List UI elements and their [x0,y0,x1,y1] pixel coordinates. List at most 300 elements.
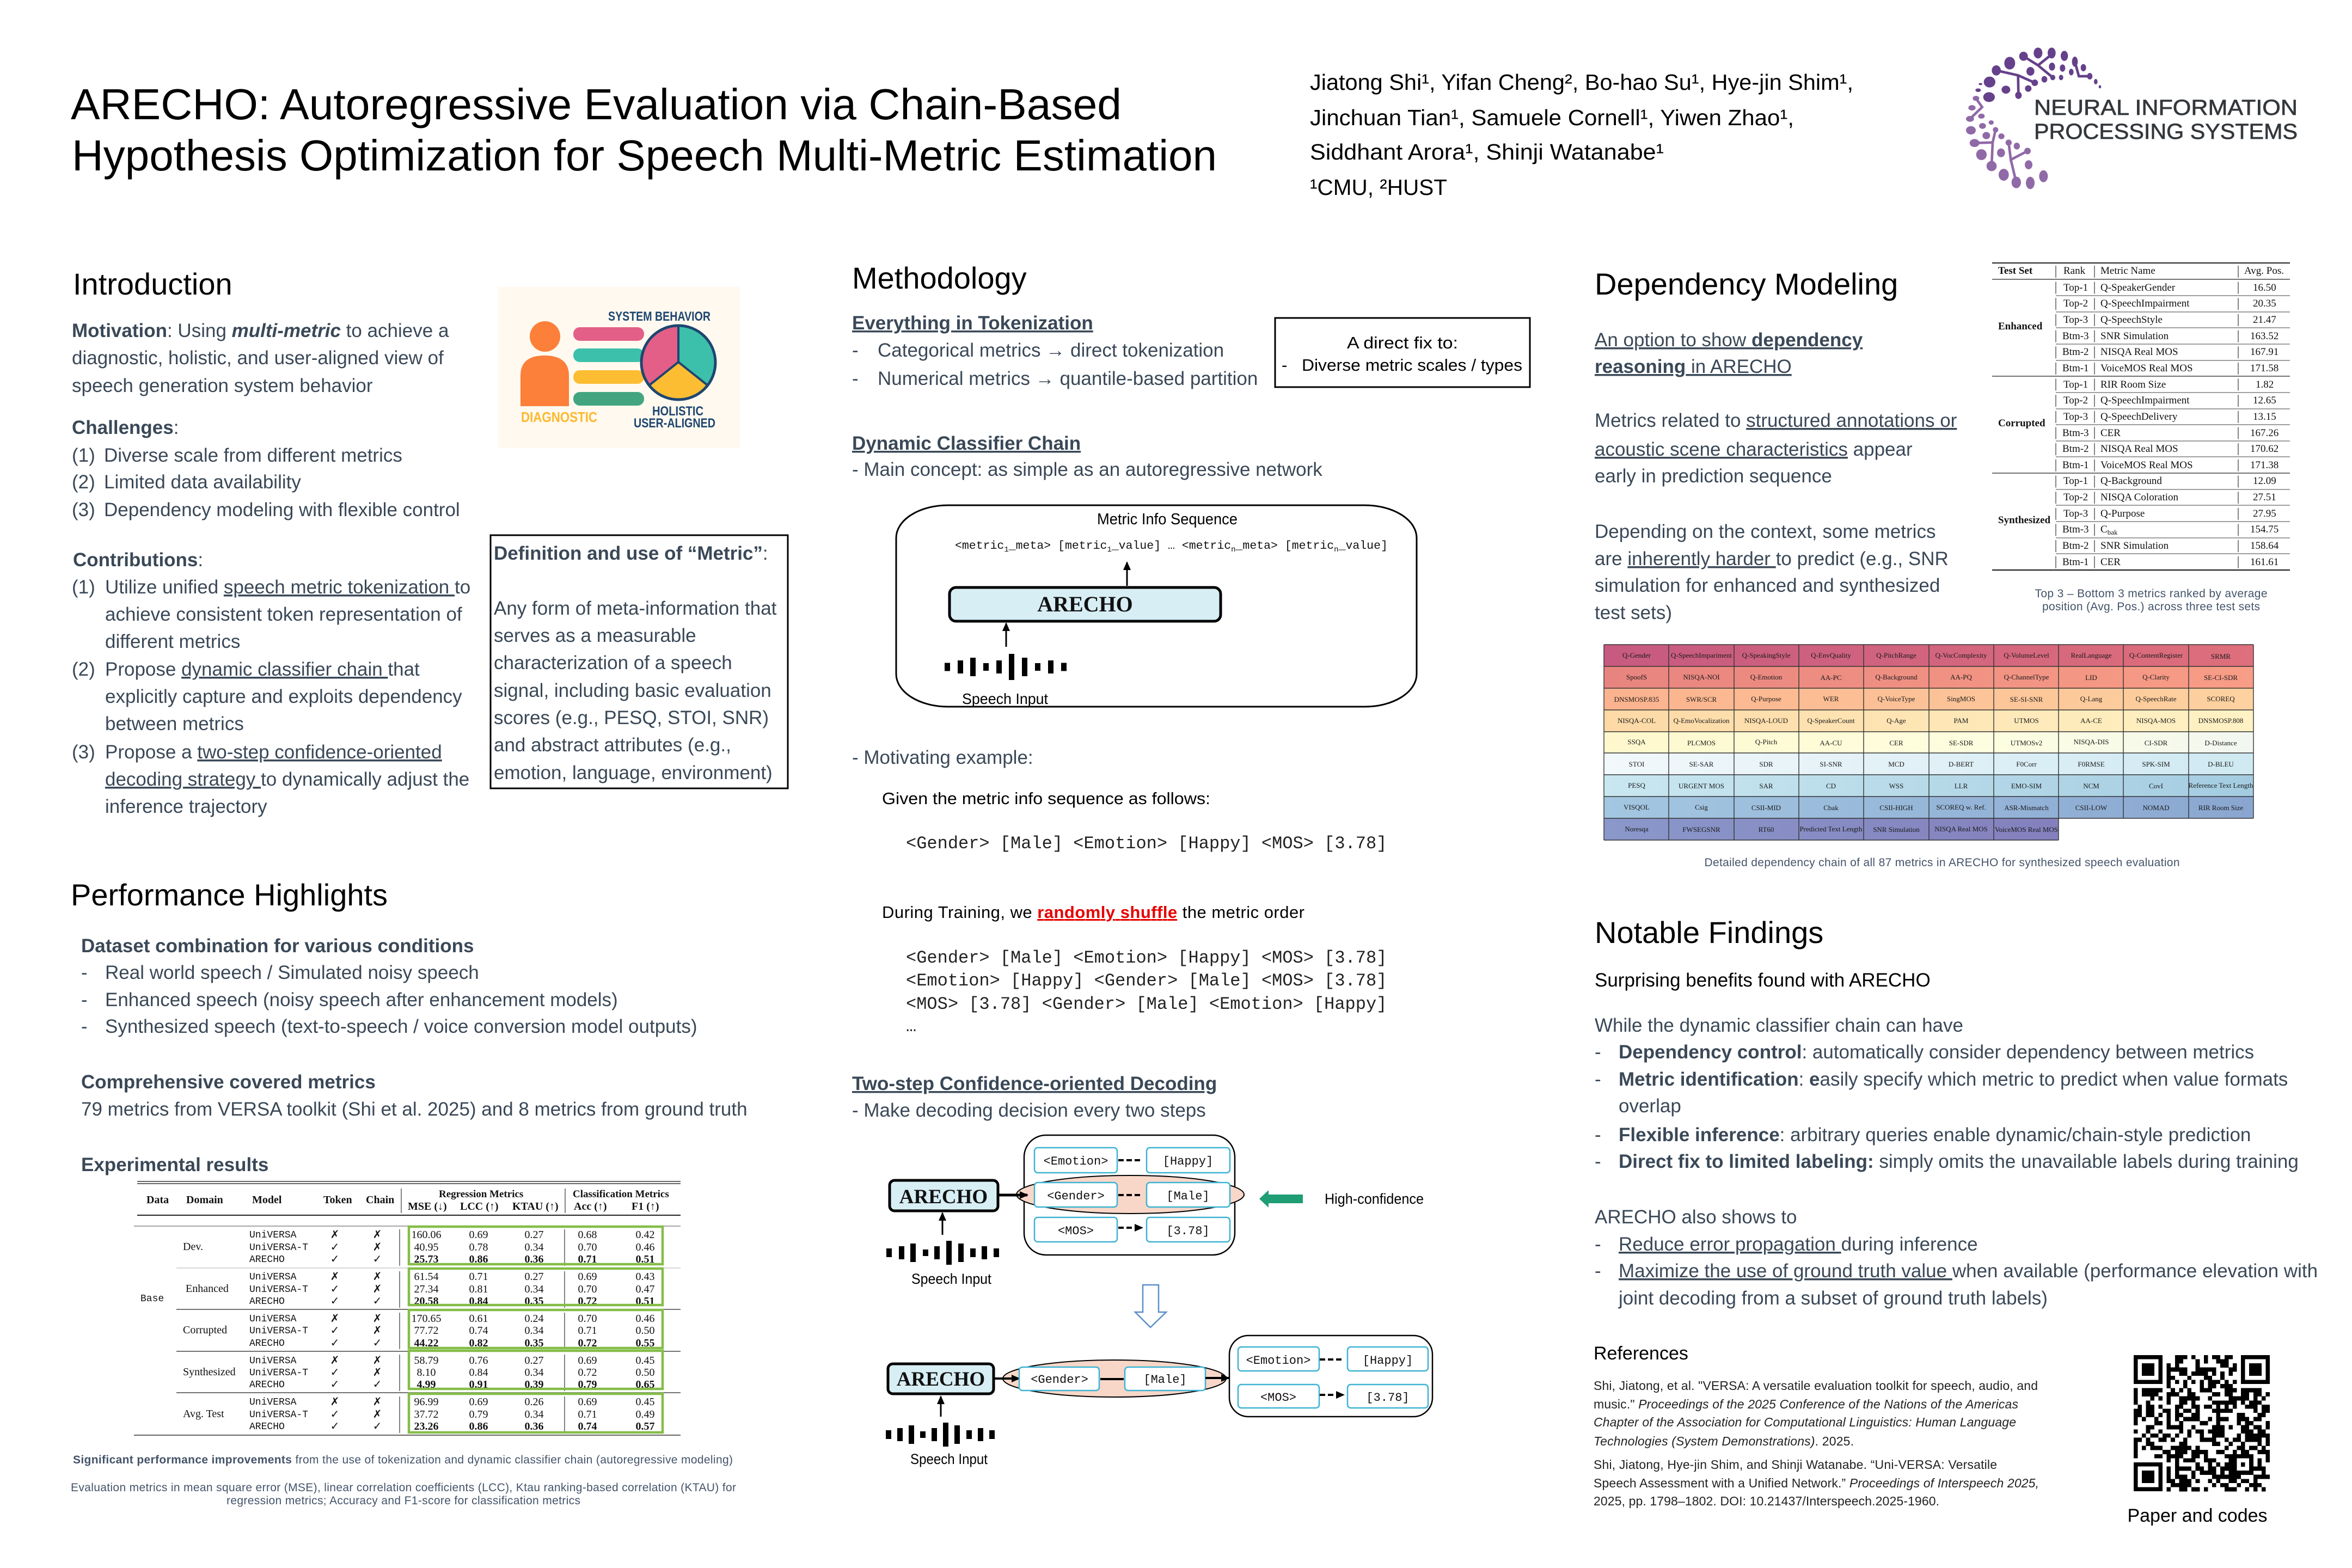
heatmap: dependency chain: NCM [2083,782,2099,790]
table: metric values: 0.27 [525,1229,543,1241]
table: token and chain marks: ✓ [330,1324,339,1337]
table: metric values: 0.36 [525,1420,543,1432]
table: metric values: 0.81 [469,1283,488,1295]
heatmap: dependency chain: SE-SI-SNR [2010,695,2043,703]
table: token and chain marks: ✓ [330,1407,339,1420]
table: token and chain marks: ✓ [373,1419,382,1432]
table: metric values [412,1229,654,1432]
heatmap: dependency chain: RT60 [1759,825,1774,834]
diagram: metric info sequence: _value] … <metric [1111,540,1231,553]
highlight ellipse [1016,1175,1244,1214]
table: metric values: 0.84 [469,1367,488,1379]
heatmap: dependency chain: RIR Room Size [2198,804,2243,812]
table: metric values: 0.82 [469,1337,488,1349]
heatmap: dependency chain: SE-CI-SDR [2204,673,2238,682]
motivating example text: <MOS> [3.78] <Gender> [Male] <Emotion> [Happy] [906,994,1387,1014]
table: top and bottom metrics: 27.95 [2253,508,2276,519]
heading: dependency modeling: Dependency Modeling [1595,267,1898,301]
heatmap: dependency chain: NISQA Real MOS [1934,825,1988,833]
table: model names: UniVERSA-T [249,1326,308,1337]
heatmap: dependency chain: WSS [1889,782,1903,790]
heatmap: dependency chain: CovI [2149,782,2163,790]
heatmap: dependency chain: NISQA-MOS [2136,716,2176,725]
dashed arrows [1320,1359,1344,1395]
table: token and chain marks: ✓ [373,1336,382,1349]
table: metric values: 0.70 [578,1313,597,1325]
table: token and chain marks: ✓ [330,1377,339,1391]
table: metric values: 0.34 [525,1325,543,1337]
table: metric values: 23.26 [414,1420,439,1432]
heatmap: dependency chain: F0RMSE [2078,760,2105,768]
table: top and bottom metrics: Btm-3 [2062,330,2089,342]
heatmap: dependency chain: NOMAD [2142,804,2170,812]
table: top and bottom metrics: Top-3 [2063,314,2088,326]
heading: methodology: Methodology [852,261,1027,295]
heatmap: dependency chain: NISQA-NOI [1683,673,1720,681]
table: metric values: 0.72 [578,1295,597,1307]
arrow: speech up [940,1396,942,1417]
diagram: metric info sequence: <metric [955,540,1004,553]
heatmap: dependency chain: WER [1823,695,1839,703]
reference entries: Shi, Jiatong, et al. "VERSA: A versatile evaluation toolkit for speech, audio, and [1594,1379,2038,1393]
table: metric values: 77.72 [414,1325,439,1337]
table: token and chain marks [330,1228,382,1432]
table: token and chain marks: ✓ [373,1252,382,1265]
table: metric values: 0.45 [636,1355,654,1367]
everything in tokenization text [852,313,1258,389]
table: token and chain marks: ✓ [330,1294,339,1307]
dynamic classifier chain text [852,433,1322,480]
panel: dependency modeling [1595,263,2290,869]
solid arrows [1100,1378,1229,1379]
table header: F1 (↑) [632,1200,659,1212]
table: metric values: 0.34 [525,1367,543,1379]
everything in tokenization text: - [852,368,859,389]
table: model names: UniVERSA-T [249,1242,308,1253]
also shows list: - [1595,1260,1601,1282]
dataset combination text: Real world speech / Simulated noisy speech [105,962,479,983]
table: data and domain labels [140,1241,236,1420]
table: top and bottom metrics: CER [2100,556,2121,568]
table: token and chain marks: ✗ [373,1365,382,1379]
heatmap: dependency chain: Csig [1695,803,1708,811]
findings list: - [1595,1124,1601,1146]
arrow: high-confidence [1259,1190,1303,1208]
table: data and domain labels: Synthesized [183,1366,236,1378]
dataset combination text [81,935,697,1037]
table: metric values: 0.46 [636,1313,654,1325]
table: metric values: 0.35 [525,1295,543,1307]
heatmap: dependency chain: SPK-SIM [2142,760,2170,768]
table: token and chain marks: ✗ [373,1312,382,1325]
table: metric values: 0.50 [636,1325,654,1337]
table: metric values: 0.34 [525,1241,543,1253]
table header [146,1189,669,1212]
heatmap: dependency chain: Q-ContentRegister [2129,651,2183,659]
table: token and chain marks: ✓ [330,1365,339,1379]
table: model names: ARECHO [249,1380,285,1391]
ARECHO box: ARECHO [1037,592,1133,616]
table header: Classification Metrics [573,1189,669,1200]
also shows list: ARECHO also shows to [1595,1206,1797,1228]
diagram: step two [888,1336,1432,1467]
table: metric values: 0.51 [636,1253,654,1265]
table caption: Evaluation metrics in mean square error (MSE), linear correlation coefficients (LCC), Ktau ranking-based correlation (KTAU) for [71,1481,736,1494]
dependency reasoning text: test sets) [1595,602,1672,623]
heatmap: dependency chain: Q-ChannelType [2004,673,2049,681]
findings list: Dependency control: automatically consider dependency between metrics [1619,1042,2254,1063]
heatmap: dependency chain: D-BLEU [2208,760,2234,768]
table header: Data [146,1194,169,1206]
heatmap: dependency chain: VoiceMOS Real MOS [1995,825,2058,834]
arrow: speech up [942,1213,943,1235]
heatmap: dependency chain: Q-SpeakerCount [1807,716,1855,725]
heatmap: dependency chain: NISQA-COL [1618,716,1656,725]
table: top and bottom metrics: SNR Simulation [2100,540,2169,552]
table: data and domain labels: Enhanced [186,1283,229,1295]
table: token and chain marks: ✗ [330,1353,339,1367]
icon: diagnostic holistic user-aligned illustration: USER-ALIGNED [634,416,715,431]
diagram: metric info sequence: Metric Info Sequence [1097,511,1238,528]
table: top and bottom metrics: 161.61 [2250,556,2278,568]
findings list [1595,1015,2299,1172]
heading: references: References [1594,1343,1688,1364]
table header: Acc (↑) [574,1200,607,1212]
diagram: metric info sequence: n [1231,546,1236,554]
table: top and bottom metrics: 167.26 [2250,427,2278,439]
diagram: metric info sequence: _meta> [metric [1008,540,1107,553]
table: metric values: 0.43 [636,1271,654,1283]
heatmap: dependency chain: Q-SpeakingStyle [1742,651,1791,659]
table: top and bottom metrics: Test Set [1998,265,2033,277]
findings list: Metric identification: easily specify which metric to predict when value formats [1619,1069,2288,1090]
dependency reasoning text: reasoning in ARECHO [1595,356,1792,377]
motivating example text: … [906,1016,916,1037]
heatmap: dependency chain: AA-PC [1820,673,1842,682]
table: metric values: 0.72 [578,1367,597,1379]
everything in tokenization text: Numerical metrics → quantile-based partition [878,368,1258,389]
table: metric values: 0.39 [525,1379,543,1391]
panel: introduction [72,267,788,817]
table: top and bottom metrics: Synthesized [1998,514,2050,526]
title: ARECHO: Autoregressive Evaluation via Chain-Based [71,80,1122,128]
motivation text: diagnostic, holistic, and user-aligned view of [72,347,444,369]
findings list: Direct fix to limited labeling: simply omits the unavailable labels during training [1619,1151,2299,1172]
heatmap: dependency chain: ASR-Mismatch [2004,804,2049,812]
panel: performance highlights [71,878,748,1507]
authors [1310,70,1853,200]
heatmap: dependency chain: AA-PQ [1950,673,1972,681]
table: token and chain marks: ✗ [330,1312,339,1325]
token boxes: gender and male [1019,1367,1205,1391]
title: Hypothesis Optimization for Speech Multi-Metric Estimation [72,131,1217,180]
heatmap: dependency chain: Q-Gender [1622,651,1651,659]
table caption: regression metrics; Accuracy and F1-score for classification metrics [226,1494,580,1507]
challenges list: (2) [72,471,95,493]
token boxes: remaining [1238,1347,1428,1408]
table: top and bottom metrics: 13.15 [2253,411,2276,422]
dependency reasoning text: An option to show dependency [1595,329,1863,351]
table: data and domain labels: Base [140,1294,164,1304]
contributions list: Propose dynamic classifier chain that [105,659,420,680]
heatmap: dependency chain: SNR Simulation [1873,825,1920,834]
reference entries [1594,1379,2039,1508]
table: top and bottom metrics: Avg. Pos. [2244,265,2284,277]
dataset combination text: Enhanced speech (noisy speech after enhancement models) [105,989,618,1010]
heading: notable findings: Notable Findings [1595,915,1823,950]
callout: definition of metric: and abstract attributes (e.g., [494,734,731,756]
diagram: metric info sequence: _meta> [metric [1235,540,1334,553]
authors: Jinchuan Tian¹, Samuele Cornell¹, Yiwen Zhao¹, [1310,105,1794,130]
heatmap: dependency chain: D-Distance [2204,739,2237,747]
token boxes: <Emotion> [1044,1155,1108,1168]
reference entries: 2025, pp. 1798–1802. DOI: 10.21437/Interspeech.2025-1960. [1594,1494,1939,1508]
contributions list: (2) [72,659,95,680]
diagram: metric info sequence: _value] [1338,540,1388,553]
callout: a direct fix: A direct fix to: [1347,333,1458,352]
motivating example text: <Emotion> [Happy] <Gender> [Male] <MOS> [3.78] [906,971,1387,991]
token boxes: remaining: <MOS> [1260,1391,1296,1405]
table: top and bottom metrics: Metric Name [2100,265,2155,277]
heatmap: dependency chain: Reference Text Length [2189,781,2253,789]
diagram: metric info sequence [896,505,1417,707]
heatmap: dependency chain: SCOREQ [2207,695,2235,703]
table: token and chain marks: ✓ [330,1419,339,1432]
table: top and bottom metrics: Top-2 [2063,395,2088,406]
icon: waveform [889,1423,992,1447]
callout: definition of metric: serves as a measurable [494,625,696,646]
heatmap: dependency chain: STOI [1629,760,1644,768]
heatmap: dependency chain: Q-VolumeLevel [2004,651,2049,659]
arrow: ARECHO to gender [995,1377,1019,1380]
covered metrics text [81,1071,748,1120]
token boxes: [3.78] [1166,1224,1210,1238]
table: metric values: 0.57 [636,1420,654,1432]
heatmap: dependency chain: Q-SpeechImpariment [1671,651,1732,659]
table: token and chain marks: ✗ [373,1228,382,1241]
table: metric values: 44.22 [414,1337,439,1349]
also shows list: - [1595,1234,1601,1255]
heatmap: dependency chain: Q-Lang [2080,695,2103,703]
panel: methodology [852,261,1530,1467]
table: model names: ARECHO [249,1296,285,1307]
heatmap: dependency chain: CSII-MID [1751,804,1781,812]
heatmap: dependency chain: Cbak [1823,804,1839,812]
table: model names: ARECHO [249,1338,285,1349]
table: top and bottom metrics: Top-2 [2063,492,2088,503]
table: token and chain marks: ✓ [330,1252,339,1265]
heading: experimental results: Experimental results [81,1154,268,1175]
table: top and bottom metrics: Top-3 [2063,411,2088,422]
callout: definition of metric: Definition and use of “Metric”: [494,543,768,564]
authors: ¹CMU, ²HUST [1310,175,1447,200]
QR code [2134,1355,2270,1491]
table: top and bottom metrics: 163.52 [2250,330,2278,342]
also shows list: joint decoding from a subset of ground truth labels) [1618,1288,2048,1309]
heatmap: dependency chain: PESQ [1628,781,1646,789]
arrow: from speech [1005,623,1007,647]
token boxes: <Gender> [1047,1190,1105,1203]
table: token and chain marks: ✗ [373,1270,382,1283]
heatmap: dependency chain: SRMR [2211,652,2231,660]
table: metric values: 0.74 [469,1325,488,1337]
table: model names [249,1230,308,1432]
table header: MSE (↓) [408,1200,447,1212]
challenges list: Dependency modeling with flexible control [104,499,460,520]
container [1024,1135,1235,1255]
heatmap: dependency chain: NISQA-LOUD [1744,716,1788,725]
heatmap: dependency chain: SWR/SCR [1686,695,1717,703]
table: metric values: 0.91 [469,1379,488,1391]
table: metric values: 0.69 [578,1355,597,1367]
heatmap: dependency chain: Predicted Text Length [1799,825,1863,833]
heatmap: dependency chain: SSQA [1627,738,1646,746]
table: top and bottom metrics: Q-SpeechImpairment [2100,298,2190,309]
table: model names: UniVERSA [249,1356,297,1367]
table: model names: UniVERSA-T [249,1410,308,1420]
table: top and bottom metrics: Btm-3 [2062,524,2089,535]
table: token and chain marks: ✗ [373,1407,382,1420]
heatmap: dependency chain: Noresqa [1625,825,1649,833]
heatmap: dependency chain: CI-SDR [2145,739,2168,747]
contributions list: inference trajectory [105,796,267,817]
heatmap: dependency chain: D-BERT [1949,760,1974,768]
heatmap: dependency chain: SE-SAR [1689,760,1714,768]
heatmap: dependency chain: PAM [1954,716,1969,725]
table: metric values: 0.68 [578,1229,597,1241]
table: metric values: 160.06 [412,1229,441,1241]
table: metric values: 40.95 [414,1241,439,1253]
table: metric values: 0.71 [578,1253,597,1265]
table: top and bottom metrics: bak [2108,528,2118,536]
reference entries: Technologies (System Demonstrations). 2025. [1594,1434,1854,1448]
icon: diagnostic holistic user-aligned illustration: SYSTEM BEHAVIOR [608,309,710,324]
table: metric values: 0.86 [469,1253,488,1265]
table caption: Significant performance improvements from the use of tokenization and dynamic classifier chain (autoregressive modeling) [73,1454,733,1466]
dependency reasoning text: acoustic scene characteristics appear [1595,439,1913,460]
table: top and bottom metrics: 20.35 [2253,298,2276,309]
table: data and domain labels: Avg. Test [183,1408,224,1420]
icon: diagnostic holistic user-aligned illustration: HOLISTIC [652,404,703,419]
table: top and bottom metrics: Top-2 [2063,298,2088,309]
table: metric values: 0.76 [469,1355,488,1367]
table header: Regression Metrics [439,1189,523,1200]
table: metric values: 0.55 [636,1337,654,1349]
dataset combination text: - [81,962,88,983]
everything in tokenization text: Everything in Tokenization [852,313,1093,334]
table caption: position (Avg. Pos.) across three test sets [2042,601,2260,613]
title [71,80,1217,180]
table: top and bottom metrics [1992,263,2290,570]
heatmap: dependency chain: Q-Emotion [1750,673,1783,681]
table: top and bottom metrics: Q-SpeakerGender [2100,282,2176,293]
table: top and bottom metrics: Q-SpeechStyle [2100,314,2163,326]
table: token and chain marks: ✓ [330,1336,339,1349]
table: top and bottom metrics: CER [2100,427,2121,439]
motivating example text: Given the metric info sequence as follows: [882,789,1210,808]
heatmap: dependency chain: SI-SNR [1820,760,1842,768]
table: top and bottom metrics: 12.65 [2253,395,2276,406]
dataset combination text: - [81,1016,88,1037]
table: metric values: 8.10 [417,1367,436,1379]
table: metric values: 0.34 [525,1408,543,1420]
table: green highlight boxes [409,1227,663,1432]
table: metric values: 0.61 [469,1313,488,1325]
table: top and bottom metrics: NISQA Real MOS [2100,346,2178,358]
logo wordmark: PROCESSING SYSTEMS [2034,120,2298,144]
table: metric values: 0.69 [469,1396,488,1408]
table: top and bottom metrics: SNR Simulation [2100,330,2169,342]
table: metric values: 0.79 [469,1408,488,1420]
motivating example text: During Training, we randomly shuffle the metric order [882,903,1304,922]
QR label: Paper and codes [2127,1505,2268,1526]
table: top and bottom metrics: Q-SpeechDelivery [2100,411,2178,422]
table: metric values: 0.27 [525,1355,543,1367]
ARECHO box [950,587,1221,621]
table: metric values: 0.86 [469,1420,488,1432]
heatmap: dependency chain: LID [2085,673,2097,682]
table header: LCC (↑) [460,1200,499,1212]
table: metric values: 0.69 [578,1271,597,1283]
heatmap: dependency chain: UTMOSv2 [2011,739,2042,747]
table: token and chain marks: ✓ [373,1377,382,1391]
table: model names: UniVERSA [249,1397,297,1408]
heatmap: dependency chain: Q-Age [1886,716,1906,725]
callout: definition of metric: signal, including basic evaluation [494,680,771,701]
table: top and bottom metrics: Q-SpeechImpairment [2100,395,2190,406]
table: top and bottom metrics: C [2100,524,2108,535]
heatmap: dependency chain: Q-Background [1875,673,1918,681]
arrow: hollow down [1135,1285,1166,1327]
table: token and chain marks: ✗ [330,1228,339,1241]
table: metric values: 96.99 [414,1396,439,1408]
dependency reasoning text [1595,329,1957,623]
table: metric values: 27.34 [414,1283,439,1295]
table: metric values: 0.84 [469,1295,488,1307]
callout: definition of metric: emotion, language, environment) [494,762,773,783]
table: top and bottom metrics: Rank [2063,265,2086,277]
challenges list: Diverse scale from different metrics [104,445,402,466]
heatmap: dependency chain: CD [1826,782,1836,790]
contributions list: (1) [72,577,95,598]
table: top and bottom metrics: Btm-1 [2062,460,2089,471]
dependency reasoning text: are inherently harder to predict (e.g., SNR [1595,548,1949,569]
heatmap: dependency chain: Q-Pitch [1755,738,1778,746]
table: metric values: 0.35 [525,1337,543,1349]
table: metric values: 4.99 [417,1379,436,1391]
logo wordmark: NEURAL INFORMATION [2034,96,2298,120]
subheading: surprising benefits: Surprising benefits found with ARECHO [1595,970,1931,991]
heatmap: dependency chain: UTMOS [2014,716,2039,725]
dynamic classifier chain text: - Main concept: as simple as an autoregressive network [852,459,1322,480]
diagram: metric info sequence: 1 [1107,546,1112,554]
table: top and bottom metrics: Btm-1 [2062,556,2089,568]
table: top and bottom metrics: 158.64 [2250,540,2279,552]
table: model names: UniVERSA-T [249,1368,308,1379]
contributions list: explicitly capture and exploits dependency [105,686,462,707]
heatmap: dependency chain: CSII-HIGH [1879,804,1913,812]
reference entries: music." Proceedings of the 2025 Conference of the Nations of the Americas [1594,1397,2019,1411]
diagram: metric info sequence: 1 [1004,546,1009,554]
heatmap: dependency chain: Q-EmoVocalization [1673,716,1730,725]
callout: definition of metric: scores (e.g., PESQ, STOI, SNR) [494,707,769,728]
table: top and bottom metrics: 167.91 [2250,346,2278,358]
heatmap: dependency chain: Q-Clarity [2142,673,2170,681]
contributions list: decoding strategy to dynamically adjust the [105,769,469,790]
ARECHO box: ARECHO [899,1186,988,1208]
table: model names: ARECHO [249,1254,285,1265]
table: top and bottom metrics: 1.82 [2256,379,2274,390]
